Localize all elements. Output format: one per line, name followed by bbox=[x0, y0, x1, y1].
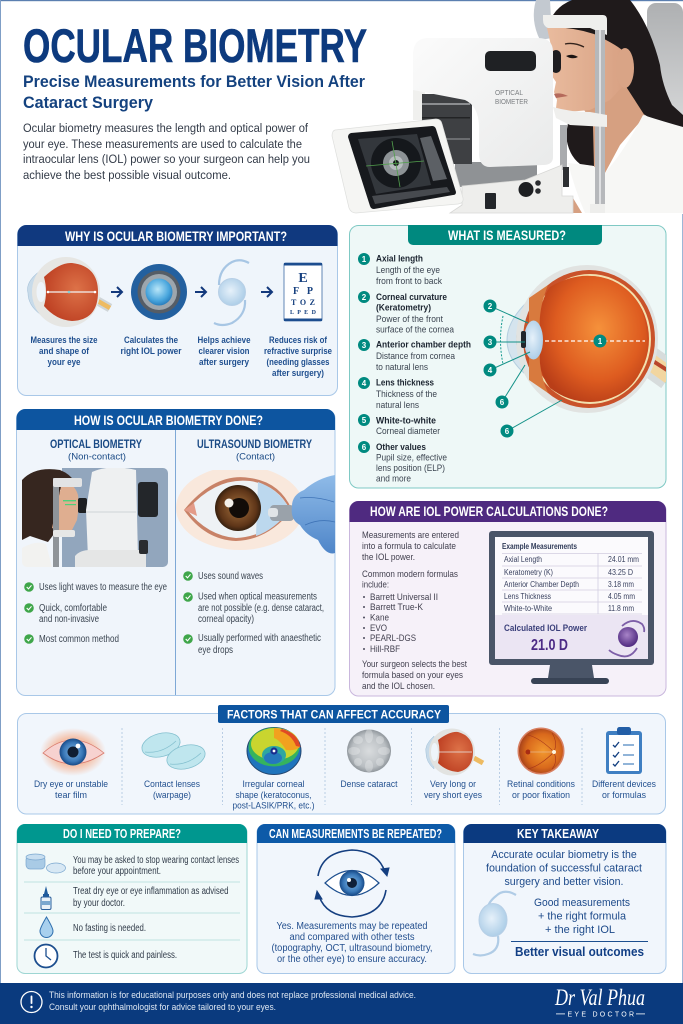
eye anatomy diagram: 4 bbox=[488, 366, 493, 375]
disclaimer bbox=[49, 990, 416, 1013]
arrow bbox=[195, 287, 206, 297]
formula text: formula based on your eyes bbox=[362, 670, 463, 681]
ultrasound biometry heading bbox=[197, 439, 312, 462]
factor captions: or poor fixation bbox=[512, 790, 570, 801]
header tab: factors bbox=[218, 705, 449, 723]
icon: IOL power disc bbox=[131, 264, 187, 320]
monitor with example measurements: White-to-White bbox=[504, 604, 552, 613]
numbered list: Thickness of the bbox=[376, 389, 437, 400]
captions: after surgery) bbox=[272, 368, 324, 379]
prepare text: before your appointment. bbox=[73, 866, 161, 877]
icon: eye with circular arrows bbox=[315, 850, 389, 917]
icon: clipboard bbox=[606, 727, 642, 774]
numbered list: and more bbox=[376, 474, 411, 484]
machine base bbox=[455, 162, 537, 187]
takeaway statement bbox=[486, 849, 642, 888]
intro paragraph: your eye. These measurements are used to calculate the bbox=[23, 137, 302, 151]
factor captions: Very long or bbox=[430, 779, 476, 790]
header: IOL bbox=[350, 501, 666, 522]
formula text: Hill-RBF bbox=[370, 644, 400, 655]
hero header text bbox=[23, 19, 367, 182]
monitor with example measurements: Calculated IOL Power bbox=[504, 623, 587, 634]
numbered list: 1 bbox=[362, 255, 367, 264]
numbered list: from front to back bbox=[376, 276, 442, 287]
numbered list: Corneal curvature bbox=[376, 292, 447, 303]
captions: Helps achieve bbox=[198, 335, 250, 346]
prepare text: by your doctor. bbox=[73, 898, 125, 909]
title: OCULAR BIOMETRY bbox=[23, 19, 367, 72]
numbered list: to natural lens bbox=[376, 362, 428, 373]
monitor with example measurements: Lens Thickness bbox=[504, 592, 551, 601]
captions: refractive surprise bbox=[264, 346, 332, 357]
captions: Calculates the bbox=[124, 335, 178, 346]
numbered list: natural lens bbox=[376, 400, 419, 411]
monitor with example measurements: 21.0 D bbox=[531, 637, 568, 654]
icon: eye chart: T O Z bbox=[291, 298, 315, 307]
factor captions: (warpage) bbox=[153, 790, 191, 801]
formula lines bbox=[511, 897, 648, 959]
factor captions: Contact lenses bbox=[144, 779, 200, 790]
eye anatomy diagram: 6 bbox=[500, 398, 505, 407]
ultrasound biometry heading: (Contact) bbox=[236, 452, 275, 462]
header: what: WHAT IS MEASURED? bbox=[448, 227, 566, 243]
header: why bbox=[18, 225, 338, 246]
formula text: Measurements are entered bbox=[362, 530, 459, 541]
numbered list: lens position (ELP) bbox=[376, 463, 445, 474]
prepare text bbox=[73, 855, 239, 961]
prepare text: No fasting is needed. bbox=[73, 923, 146, 934]
factor captions: Dry eye or unstable bbox=[34, 779, 108, 790]
factor captions: Different devices bbox=[592, 779, 656, 790]
photo: optical biometry bbox=[22, 467, 168, 567]
panel: why is ocular biometry important bbox=[18, 225, 338, 396]
formula text: Common modern formulas bbox=[362, 569, 458, 580]
machine body bbox=[413, 88, 425, 120]
numbered list: Anterior chamber depth bbox=[376, 340, 471, 350]
numbered list: surface of the cornea bbox=[376, 324, 455, 336]
header: repeated: CAN MEASUREMENTS BE REPEATED? bbox=[269, 827, 442, 841]
captions: (needing glasses bbox=[266, 357, 330, 368]
numbered list: 2 bbox=[362, 293, 367, 302]
eye anatomy diagram: 6 bbox=[505, 427, 510, 436]
numbered list bbox=[358, 253, 471, 484]
icon: red dry eye bbox=[40, 728, 106, 776]
disclaimer: Consult your ophthalmologist for advice tailored to your eyes. bbox=[49, 1002, 276, 1013]
list: ultrasound points: Usually performed with anaesthetic bbox=[198, 633, 321, 644]
panel: factors that can affect accuracy bbox=[18, 705, 666, 814]
icon: information warning bbox=[21, 992, 42, 1012]
neck bbox=[583, 85, 645, 173]
icon: eye cross-section bbox=[28, 257, 110, 327]
eye anatomy diagram bbox=[484, 265, 670, 438]
monitor with example measurements: 43.25 D bbox=[608, 568, 633, 577]
arrow bbox=[261, 287, 272, 297]
icon: intraocular lens bbox=[214, 260, 249, 325]
formula lines: + the right formula bbox=[538, 910, 627, 922]
formula text: EVO bbox=[370, 623, 387, 634]
factor captions: Retinal conditions bbox=[507, 779, 575, 790]
factor captions: shape (keratoconus, bbox=[236, 790, 312, 801]
header: how: HOW IS OCULAR BIOMETRY DONE? bbox=[74, 412, 263, 428]
list: ultrasound points: Used when optical measurements bbox=[198, 592, 317, 602]
icon: purple IOL bbox=[609, 621, 644, 656]
list: ultrasound points: eye drops bbox=[198, 645, 233, 656]
monitor with example measurements: Example Measurements bbox=[502, 542, 577, 551]
icon: clock bbox=[34, 944, 58, 968]
takeaway statement: surgery and better vision. bbox=[504, 876, 624, 888]
formula lines: + the right IOL bbox=[545, 924, 615, 936]
formula lines: Good measurements bbox=[534, 897, 630, 909]
list: ultrasound points bbox=[183, 571, 324, 656]
icon: retina bbox=[518, 728, 564, 774]
eye anatomy diagram: 3 bbox=[488, 338, 493, 347]
icon: lens case bbox=[26, 854, 66, 873]
icon: dense cataract bbox=[347, 729, 391, 772]
repeated text: or the other eye) to ensure accuracy. bbox=[277, 954, 427, 965]
numbered list: 3 bbox=[362, 341, 367, 350]
optical biometry heading: OPTICAL BIOMETRY bbox=[50, 439, 142, 451]
captions: and shape of bbox=[39, 346, 90, 357]
icon: water drop bbox=[40, 917, 53, 938]
numbered list: Length of the eye bbox=[376, 265, 440, 276]
numbered list: Axial length bbox=[376, 254, 423, 264]
list: optical points: Quick, comfortable bbox=[39, 603, 107, 614]
icon: eye chart bbox=[284, 263, 322, 321]
formula text: Kane bbox=[370, 612, 389, 624]
eye anatomy diagram: 2 bbox=[488, 302, 493, 311]
face bbox=[547, 28, 624, 112]
panel: do I need to prepare bbox=[17, 824, 247, 974]
eye anatomy diagram: 1 bbox=[598, 337, 603, 346]
monitor with example measurements: Keratometry (K) bbox=[504, 568, 553, 577]
panel: can measurements be repeated bbox=[257, 824, 455, 974]
subtitle bbox=[23, 72, 365, 112]
numbered list: 4 bbox=[362, 379, 367, 388]
panel: how is ocular biometry done bbox=[16, 409, 335, 696]
logo: Dr Val Phua bbox=[554, 985, 645, 1018]
icon: eye drop bottle bbox=[41, 886, 51, 910]
header: prepare: DO I NEED TO PREPARE? bbox=[63, 827, 181, 841]
intro paragraph: Ocular biometry measures the length and optical power of bbox=[23, 121, 309, 135]
icon: eye chart: F P bbox=[293, 286, 313, 297]
numbered list: (Keratometry) bbox=[376, 302, 431, 314]
header: prepare bbox=[17, 824, 247, 843]
icon: IOL bbox=[473, 892, 516, 956]
list: ultrasound points: corneal opacity) bbox=[198, 614, 254, 625]
factor captions: Irregular corneal bbox=[242, 779, 304, 790]
icon: corneal topography bbox=[247, 728, 301, 774]
monitor with example measurements: Anterior Chamber Depth bbox=[504, 580, 579, 589]
intro paragraph: intraocular lens (IOL) power so your surgeon can help you bbox=[23, 152, 310, 166]
prepare text: Treat dry eye or eye inflammation as advised bbox=[73, 886, 228, 897]
takeaway statement: Accurate ocular biometry is the bbox=[491, 849, 637, 861]
monitor with example measurements: Axial Length bbox=[504, 555, 542, 564]
list: optical points: and non-invasive bbox=[39, 614, 99, 625]
monitor with example measurements: 11.8 mm bbox=[608, 604, 634, 613]
headrest and pole bbox=[543, 15, 607, 35]
ultrasound biometry heading: ULTRASOUND BIOMETRY bbox=[197, 439, 312, 451]
factor captions: tear film bbox=[55, 790, 87, 801]
logo: Dr Val Phua: EYE DOCTOR bbox=[568, 1012, 634, 1018]
icon: contact lenses bbox=[139, 729, 208, 773]
icon: eye chart: E bbox=[298, 271, 308, 286]
repeated text: (topography, OCT, ultrasound biometry, bbox=[272, 943, 432, 954]
formula text: Your surgeon selects the best bbox=[362, 659, 467, 670]
formula text: Barrett True-K bbox=[370, 602, 424, 613]
captions: Measures the size bbox=[30, 335, 98, 346]
numbered list: Corneal diameter bbox=[376, 426, 440, 437]
factor captions: very short eyes bbox=[424, 790, 482, 801]
formula text bbox=[362, 530, 467, 692]
shirt bbox=[568, 115, 683, 213]
factor captions: Dense cataract bbox=[340, 779, 398, 790]
photo: ultrasound probe on eye bbox=[176, 466, 335, 553]
captions: Reduces risk of bbox=[269, 335, 328, 346]
hero photo: patient at optical biometer bbox=[332, 0, 683, 213]
hero photo: patient at optical biometer: BIOMETER bbox=[495, 99, 528, 106]
factor captions bbox=[34, 779, 656, 812]
numbered list: Pupil size, effective bbox=[376, 452, 447, 464]
intro paragraph: achieve the best possible visual outcome. bbox=[23, 168, 231, 182]
formula text: the IOL power. bbox=[362, 552, 415, 563]
hero photo: patient at optical biometer: OPTICAL bbox=[495, 90, 523, 97]
header: takeaway: KEY TAKEAWAY bbox=[517, 827, 600, 841]
list: ultrasound points: Uses sound waves bbox=[198, 571, 263, 582]
optical biometry heading bbox=[50, 439, 142, 462]
header: repeated bbox=[257, 824, 455, 843]
panel: IOL power calculations bbox=[350, 501, 666, 696]
numbered list: Lens thickness bbox=[376, 378, 434, 388]
formula text: Barrett Universal II bbox=[370, 592, 438, 603]
hair: back and crown bbox=[548, 0, 683, 128]
prepare text: The test is quick and painless. bbox=[73, 950, 177, 961]
footer band bbox=[0, 983, 683, 1024]
formula lines: Better visual outcomes bbox=[515, 944, 644, 959]
header: what bbox=[408, 225, 602, 245]
captions bbox=[30, 335, 332, 379]
tablet bbox=[332, 119, 463, 213]
list: ultrasound points: are not possible (e.g. dense cataract, bbox=[198, 603, 324, 614]
formula text: into a formula to calculate bbox=[362, 541, 456, 552]
numbered list: 6 bbox=[362, 443, 367, 452]
header: IOL: HOW ARE IOL POWER CALCULATIONS DONE? bbox=[370, 503, 608, 519]
captions: right IOL power bbox=[120, 346, 182, 357]
header: how bbox=[16, 409, 335, 430]
monitor with example measurements bbox=[489, 531, 654, 684]
monitor with example measurements: 24.01 mm bbox=[608, 555, 639, 564]
numbered list: Distance from cornea bbox=[376, 351, 456, 362]
numbered list: 5 bbox=[362, 416, 367, 425]
header: why: WHY IS OCULAR BIOMETRY IMPORTANT? bbox=[65, 228, 287, 244]
captions: after surgery bbox=[199, 357, 250, 368]
numbered list: Power of the front bbox=[376, 314, 443, 325]
panel: key takeaway bbox=[464, 824, 666, 974]
monitor with example measurements: 4.05 mm bbox=[608, 592, 635, 601]
intro paragraph bbox=[23, 121, 310, 182]
takeaway statement: foundation of successful cataract bbox=[486, 862, 642, 874]
formula text: include: bbox=[362, 580, 389, 590]
subtitle: Cataract Surgery bbox=[23, 93, 154, 112]
optical biometry heading: (Non-contact) bbox=[68, 452, 126, 462]
captions: your eye bbox=[48, 357, 80, 368]
panel: what is measured bbox=[350, 225, 670, 488]
list: optical points bbox=[24, 582, 167, 645]
formula text: PEARL-DGS bbox=[370, 633, 416, 644]
logo: Dr Val Phua: Dr Val Phua bbox=[554, 985, 645, 1010]
factor captions: post-LASIK/PRK, etc.) bbox=[232, 800, 314, 812]
numbered list: White-to-white bbox=[376, 416, 436, 426]
header tab: factors: FACTORS THAT CAN AFFECT ACCURACY bbox=[227, 708, 441, 722]
list: optical points: Most common method bbox=[39, 634, 119, 645]
factor captions: or formulas bbox=[602, 790, 646, 801]
captions: clearer vision bbox=[198, 346, 250, 357]
formula text: and the IOL chosen. bbox=[362, 681, 435, 692]
repeated text: Yes. Measurements may be repeated bbox=[276, 921, 428, 932]
header: takeaway bbox=[464, 824, 666, 843]
monitor with example measurements: 3.18 mm bbox=[608, 580, 634, 589]
icon: eye chart: L P E D bbox=[290, 310, 317, 316]
disclaimer: This information is for educational purposes only and does not replace professional medical advice. bbox=[49, 990, 416, 1001]
repeated text bbox=[272, 921, 432, 965]
list: optical points: Uses light waves to measure the eye bbox=[39, 582, 167, 593]
icon: long/short eye bbox=[426, 728, 483, 776]
prepare text: You may be asked to stop wearing contact lenses bbox=[73, 855, 239, 866]
arrow bbox=[111, 287, 122, 297]
repeated text: and compared with other tests bbox=[290, 932, 415, 943]
subtitle: Precise Measurements for Better Vision After bbox=[23, 72, 365, 91]
numbered list: Other values bbox=[376, 442, 426, 453]
